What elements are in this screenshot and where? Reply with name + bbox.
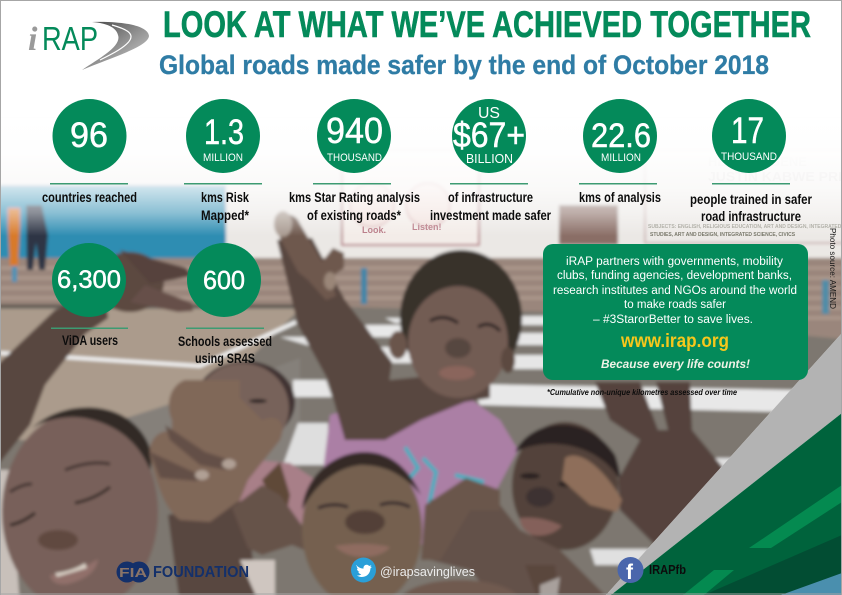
stat: 940 thousand xyxy=(289,99,420,223)
stat: 17 thousand: THOUSAND xyxy=(721,151,777,163)
white top fade xyxy=(0,118,842,236)
kid top left: arm and hand xyxy=(1,306,110,463)
stat: 600 schools xyxy=(178,243,272,366)
stat: 940 thousand: of existing roads* xyxy=(307,208,402,223)
FIA Foundation logo: FOUNDATION xyxy=(153,564,249,581)
iRAP logo xyxy=(28,20,149,70)
raised arm xyxy=(277,238,392,440)
stat: 17 thousand xyxy=(690,99,813,224)
faint wall lettering: Look. xyxy=(362,225,386,235)
stat: 22.6 million xyxy=(579,99,661,205)
stat: 1.3 million xyxy=(184,99,262,223)
stat: 17 thousand: 17 xyxy=(731,110,764,151)
stat: 1.3 million: 1.3 xyxy=(204,113,244,152)
callout: iRAP partners: – #3StarorBetter to save lives. xyxy=(593,314,753,326)
stat: US$67+ billion: $67+ xyxy=(453,116,525,155)
stat: 22.6 million: kms of analysis xyxy=(579,190,661,205)
stat: 96 countries xyxy=(42,99,137,205)
facebook handle: IRAPfb xyxy=(649,562,686,577)
callout: iRAP partners: iRAP partners with governments, mobility xyxy=(566,256,783,268)
stat: 940 thousand: kms Star Rating analysis xyxy=(289,190,420,205)
photo credit: Photo source: AMEND xyxy=(828,228,837,309)
decorative corner: green road swoosh xyxy=(606,333,842,595)
stat: 96 countries: 96 xyxy=(70,116,108,155)
stat: 600 schools: Schools assessed xyxy=(178,334,272,349)
right hand xyxy=(595,382,725,545)
iRAP logo: i xyxy=(28,21,38,58)
faint wall lettering: Listen! xyxy=(412,222,442,232)
faint wall lettering xyxy=(362,224,841,237)
stat: 1.3 million: Mapped* xyxy=(201,208,250,223)
callout: iRAP partners: clubs, funding agencies, development banks, xyxy=(557,270,792,282)
FIA Foundation logo: FIA xyxy=(119,565,148,580)
faint wall lettering: SUBJECTS: ENGLISH, RELIGIOUS EDUCATION, ART AND DESIGN, INTEGRATED xyxy=(648,224,842,230)
stat: 600 schools: 600 xyxy=(203,265,245,295)
faint wall lettering: HEAD OF GENE xyxy=(708,154,807,169)
child behind hand xyxy=(202,360,296,426)
callout: iRAP partners: Because every life counts! xyxy=(601,357,750,371)
front clasped arms xyxy=(430,495,615,595)
stat: US$67+ billion xyxy=(430,99,552,223)
callout: iRAP partners: www.irap.org xyxy=(620,331,729,352)
left child xyxy=(0,470,20,595)
stat: 22.6 million: 22.6 xyxy=(591,117,651,155)
foreground hand xyxy=(168,500,258,595)
callout: iRAP partners: to make roads safer xyxy=(624,299,726,311)
FIA Foundation logo xyxy=(116,562,249,582)
stat: 22.6 million: MILLION xyxy=(601,152,641,164)
footnote: *Cumulative non-unique kilometres assessed over time xyxy=(547,387,737,397)
iRAP logo: RAP xyxy=(42,20,98,57)
twitter handle: @irapsavinglives xyxy=(380,564,475,579)
stat: 1.3 million: kms Risk xyxy=(201,190,249,205)
stat: US$67+ billion: BILLION xyxy=(466,151,513,166)
neck of central girl xyxy=(340,370,490,440)
stat: 600 schools: using SR4S xyxy=(195,351,255,366)
facebook handle: f xyxy=(626,561,634,584)
second hand xyxy=(233,484,305,556)
stat: 6,300 ViDA users: 6,300 xyxy=(57,266,121,294)
pink shirt xyxy=(322,395,518,545)
stat: US$67+ billion: investment made safer xyxy=(430,208,552,223)
stat: US$67+ billion: of infrastructure xyxy=(448,190,533,205)
faint wall lettering: JUSTIN KABWE PRI xyxy=(708,169,842,184)
background photo: children on a road crossing xyxy=(1,171,841,595)
stat: 17 thousand: road infrastructure xyxy=(701,209,801,224)
twitter handle xyxy=(351,558,475,582)
subtitle: Global roads made safer by the end of October 2018 xyxy=(159,50,769,80)
callout: iRAP partners: research institutes and NGOs around the world xyxy=(553,285,797,297)
central bottom child xyxy=(302,453,422,595)
stat: 6,300 ViDA users xyxy=(51,243,128,348)
stat: 6,300 ViDA users: ViDA users xyxy=(62,333,118,348)
central girl head xyxy=(398,248,524,354)
facebook handle xyxy=(618,557,686,584)
stat: 940 thousand: THOUSAND xyxy=(327,152,382,164)
right child xyxy=(512,422,618,550)
stat: US$67+ billion: US xyxy=(478,105,500,122)
stat: 96 countries: countries reached xyxy=(42,190,137,205)
stat: 940 thousand: 940 xyxy=(326,110,383,151)
stat: 1.3 million: MILLION xyxy=(203,152,243,164)
faint wall lettering: STUDIES, ART AND DESIGN, INTEGRATED SCIENCE, CIVICS xyxy=(650,232,796,238)
callout: iRAP partners xyxy=(543,244,808,380)
stat: 17 thousand: people trained in safer xyxy=(690,192,813,207)
